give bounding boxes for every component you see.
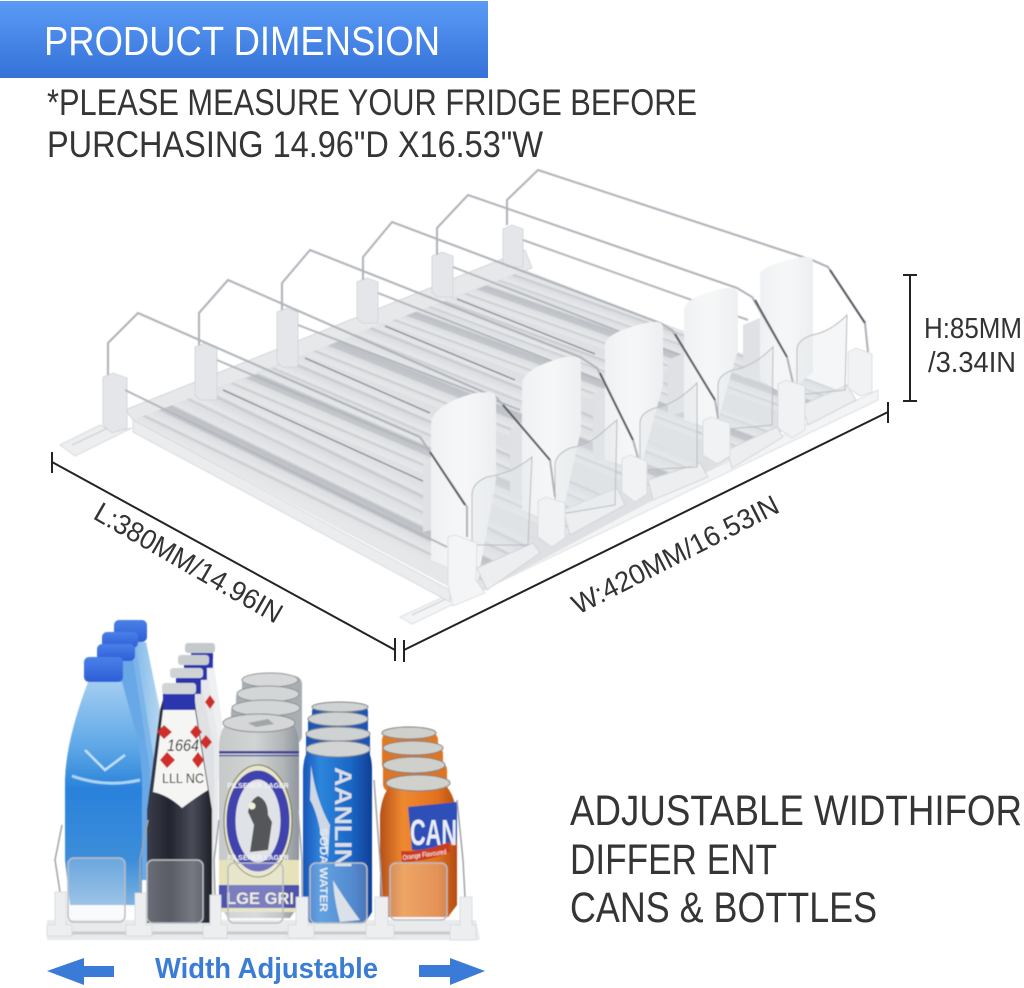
lane 1 wire and pusher — [195, 280, 565, 590]
rear clear strip — [125, 250, 532, 422]
rack base — [47, 920, 480, 940]
soda can brand: AANLIN — [329, 767, 356, 868]
adjustable width caption: CANS & BOTTLES — [570, 884, 877, 932]
length label: L:380MM/14.96IN — [89, 496, 288, 629]
width dimension line — [404, 402, 888, 662]
clear pusher cups — [68, 858, 447, 923]
soda can subtitle: SODA WATER — [317, 828, 329, 912]
height label: /3.34IN — [928, 347, 1016, 379]
arrow: left — [47, 958, 114, 985]
beer bottles — [147, 643, 222, 923]
label text: 1664 — [167, 736, 199, 755]
separator posts — [47, 892, 476, 940]
orange can brand: CAN — [410, 812, 457, 853]
fridge measurement note — [47, 82, 697, 165]
slatted lanes — [133, 270, 850, 602]
beer bottles: LLL NC — [162, 770, 204, 786]
front-left wire and posts — [103, 313, 485, 606]
banner title: PRODUCT DIMENSION — [44, 18, 440, 64]
orange cans — [380, 727, 457, 917]
soda cans — [303, 702, 372, 923]
product illustration: drink organizer rack — [60, 170, 878, 624]
height label — [924, 313, 1022, 379]
orange can flavor: Orange Flavoured — [402, 849, 447, 862]
can label text: LGE GRI — [226, 889, 294, 908]
width adjustable label: Width Adjustable — [155, 953, 378, 985]
side wires — [55, 780, 465, 897]
lane 4 wire and pusher — [432, 195, 805, 468]
can seal text: PILSENER LAGER — [227, 783, 289, 790]
fridge measurement note: PURCHASING 14.96"D X16.53"W — [47, 124, 543, 165]
arrow: right — [419, 958, 485, 985]
beer cans — [219, 673, 302, 918]
width label: W:420MM/16.53IN — [567, 489, 784, 620]
height dimension bracket — [903, 275, 917, 401]
fridge measurement note: *PLEASE MEASURE YOUR FRIDGE BEFORE — [47, 82, 697, 123]
product photo: bottles and cans in rack — [47, 620, 480, 940]
water bottles — [65, 620, 160, 905]
adjustable width caption: DIFFER ENT — [570, 836, 777, 884]
adjustable width caption — [570, 787, 1022, 932]
header banner — [0, 1, 488, 78]
beer cans: PILSENER LAGER — [227, 855, 289, 862]
lane 2 wire and pusher — [277, 250, 647, 535]
lane 3 wire and pusher — [357, 222, 730, 500]
lane 5 wire and pusher — [503, 170, 872, 425]
base plate and feet — [60, 390, 878, 624]
length dimension line — [52, 452, 395, 661]
